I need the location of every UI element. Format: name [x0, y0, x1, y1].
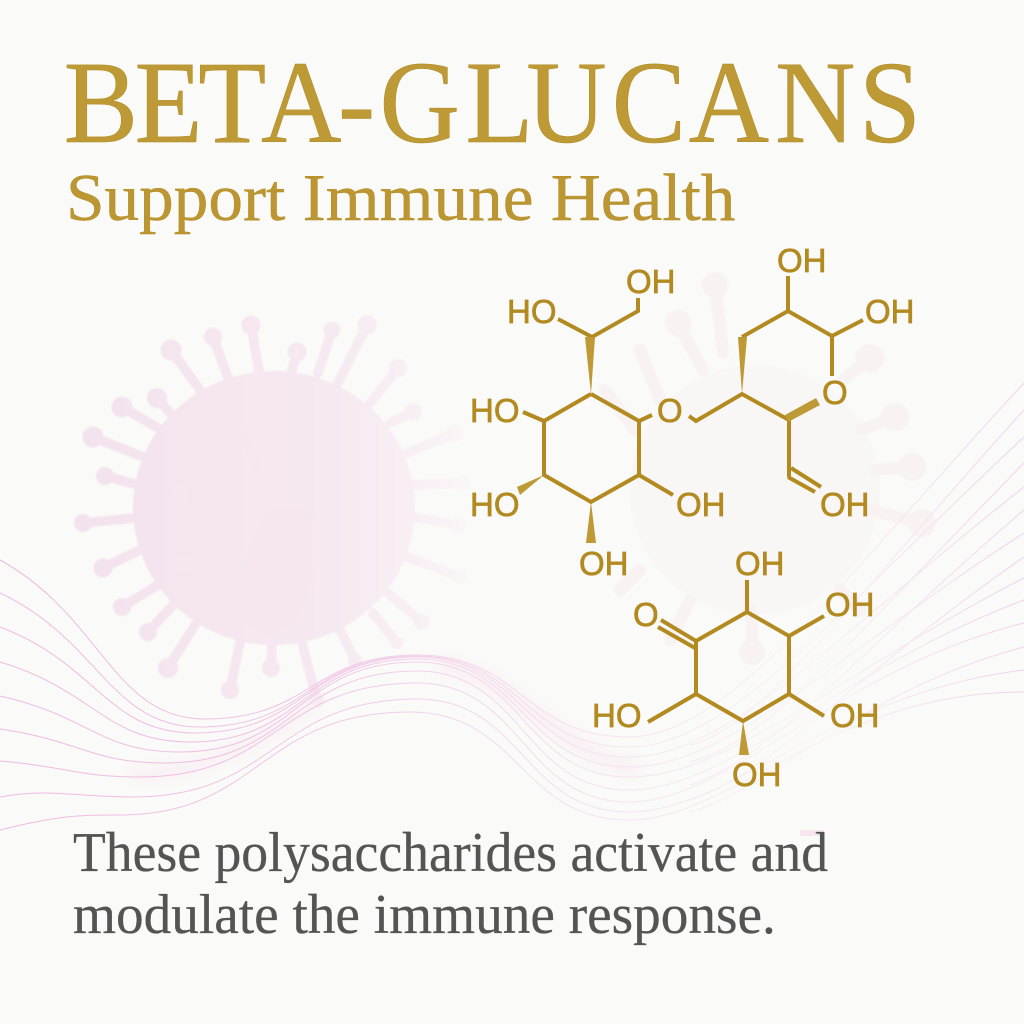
atom labels — [470, 242, 914, 582]
body text: modulate the immune response. — [73, 884, 776, 946]
flowing wave lines — [0, 383, 1024, 830]
atom labels: OH — [777, 242, 826, 279]
atom labels — [592, 545, 880, 793]
atom labels: OH — [735, 545, 784, 582]
atom labels: OH — [676, 486, 726, 523]
atom labels: OH — [865, 293, 914, 330]
atom labels: O — [657, 392, 683, 429]
bonds — [648, 580, 824, 722]
stereo wedge — [739, 721, 749, 755]
atom labels: OH — [626, 263, 676, 300]
virus illustration: faint background — [605, 272, 936, 665]
atom labels: HO — [592, 697, 642, 734]
atom labels: O — [822, 374, 848, 411]
atom labels: OH — [732, 756, 782, 793]
virus surface mottling — [175, 425, 290, 600]
atom labels: HO — [470, 486, 520, 523]
molecule: disaccharide structure — [470, 242, 914, 582]
atom labels: OH — [820, 486, 870, 523]
body text — [73, 821, 828, 946]
atom labels: HO — [507, 293, 556, 330]
body text: These polysaccharides activate and — [73, 821, 828, 883]
virus illustration: main pink particle — [74, 316, 470, 707]
subtitle: Support Immune Health — [66, 160, 735, 235]
atom labels: HO — [470, 392, 520, 429]
title: BETA-GLUCANS — [64, 37, 921, 168]
atom labels: OH — [830, 697, 880, 734]
atom labels: O — [633, 596, 659, 633]
stereo wedges — [517, 337, 820, 543]
molecule: cyclohexanone structure — [592, 545, 880, 793]
bonds — [523, 276, 863, 502]
atom labels: OH — [579, 545, 628, 582]
atom labels: OH — [825, 586, 874, 623]
